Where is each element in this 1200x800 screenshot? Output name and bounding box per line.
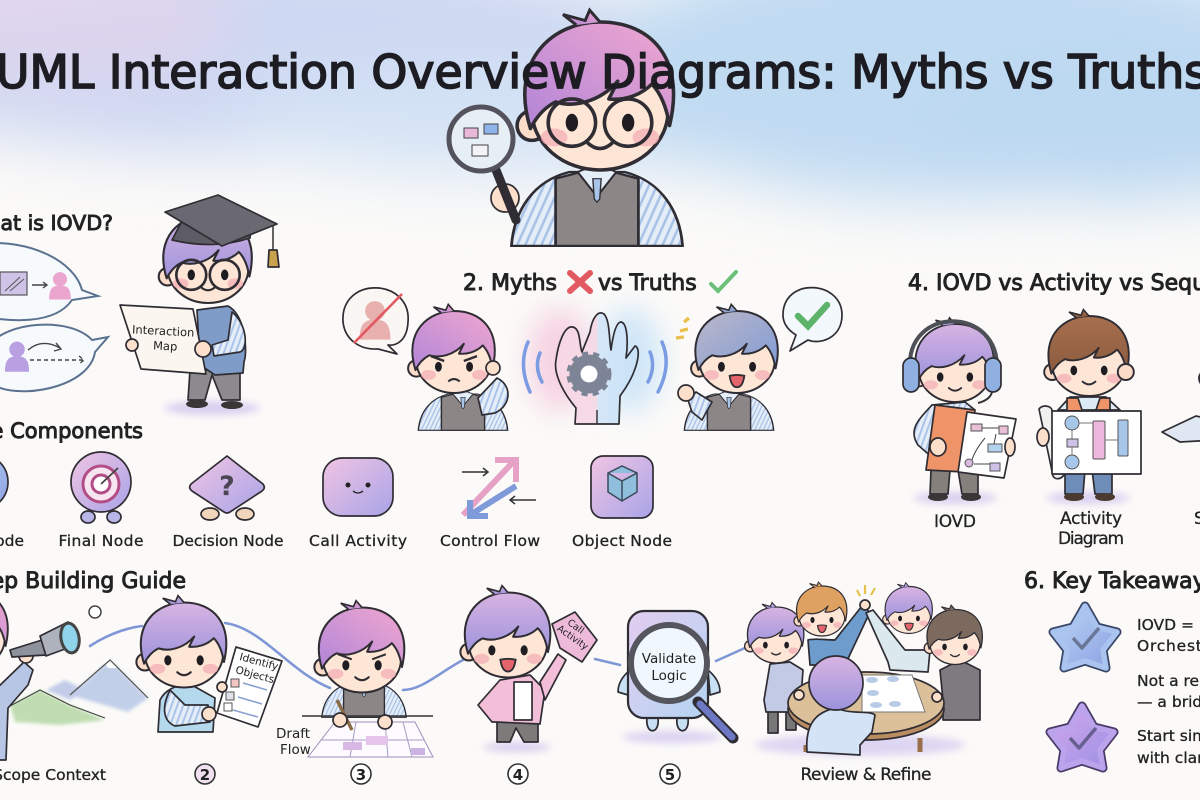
tick icon xyxy=(798,305,827,326)
takeaway text 3 xyxy=(1137,727,1200,767)
tick icon xyxy=(711,272,736,291)
draft flow label: Draft xyxy=(276,726,310,742)
speech bubble: sequence flow xyxy=(0,325,108,391)
number: 3 xyxy=(356,766,366,784)
shoes xyxy=(186,400,243,409)
head xyxy=(1199,314,1200,403)
panel: what is IOVD xyxy=(0,195,279,415)
mountains xyxy=(10,658,148,725)
map paper: Map xyxy=(153,338,178,354)
shadow xyxy=(1046,492,1130,504)
hands xyxy=(930,438,1015,456)
shoes xyxy=(928,493,981,501)
palm xyxy=(556,313,638,424)
table edge xyxy=(302,715,433,717)
cross icon xyxy=(570,273,590,291)
bust xyxy=(684,392,774,430)
raised arm xyxy=(540,654,566,700)
step 6: review team xyxy=(745,582,982,785)
raised arm xyxy=(478,378,508,415)
takeaway text 1: IOVD = xyxy=(1137,616,1194,634)
heading xyxy=(463,271,736,296)
lens xyxy=(631,625,707,701)
hands xyxy=(202,682,227,721)
headset xyxy=(903,321,1001,403)
body xyxy=(158,684,215,732)
label: Review & Refine xyxy=(800,765,932,785)
apron xyxy=(926,405,975,472)
truth character xyxy=(676,304,778,430)
label: Diagram xyxy=(1058,529,1124,549)
number xyxy=(660,764,680,784)
initial node xyxy=(0,454,24,550)
bust xyxy=(418,392,508,430)
panel: myths vs truths xyxy=(343,271,842,430)
takeaway text 2 xyxy=(1137,672,1200,711)
map paper xyxy=(120,305,206,374)
arms and legs xyxy=(618,670,720,731)
torso xyxy=(197,306,246,375)
shadow xyxy=(164,401,260,415)
heading: 2. Myths xyxy=(463,271,557,296)
hands xyxy=(794,600,942,702)
checklist: Objects xyxy=(234,664,275,686)
character bust xyxy=(511,168,683,246)
speech bubble: interaction fragment xyxy=(0,243,98,320)
map paper: Interaction xyxy=(132,322,195,340)
head xyxy=(691,304,778,393)
gear hand xyxy=(523,308,666,424)
bust xyxy=(322,681,406,717)
jacket xyxy=(478,675,545,724)
step 3: draft flow xyxy=(276,601,433,784)
sparkles xyxy=(676,318,689,338)
panel: step building guide xyxy=(0,569,982,785)
panel: components xyxy=(0,419,672,550)
hands xyxy=(126,339,211,357)
head xyxy=(408,304,495,393)
telescope xyxy=(10,622,81,657)
step 5: validate logic xyxy=(618,611,733,784)
number: 2 xyxy=(200,766,210,784)
torso xyxy=(1058,397,1120,410)
number xyxy=(351,764,371,784)
grid plan xyxy=(308,722,433,757)
magnifier xyxy=(449,107,516,220)
explorer xyxy=(0,584,33,760)
hand xyxy=(491,184,519,212)
star icon: blue xyxy=(1053,606,1117,668)
step 2: identify objects xyxy=(136,596,282,784)
head xyxy=(314,601,404,692)
takeaway text 1 xyxy=(1137,616,1200,655)
final node xyxy=(58,452,144,550)
draft flow label: Flow xyxy=(280,742,311,758)
shadow xyxy=(483,742,551,752)
label xyxy=(1058,509,1124,549)
head xyxy=(136,596,226,688)
decision node: ? xyxy=(219,471,235,502)
puzzle piece: Call xyxy=(565,617,586,637)
control flow: Control Flow xyxy=(440,532,540,550)
myth character xyxy=(408,304,508,430)
legs xyxy=(930,470,978,494)
IOVD character xyxy=(903,318,1016,532)
step 1: scope context xyxy=(0,584,148,784)
decision node: Decision Node xyxy=(172,532,284,550)
step 5: validate logic: Logic xyxy=(651,668,687,684)
label: Activity xyxy=(1060,509,1122,529)
head xyxy=(159,208,252,303)
call activity: Call Activity xyxy=(309,532,407,550)
panel: key takeaways xyxy=(1024,569,1200,768)
shadow xyxy=(755,734,965,756)
panel: IOVD vs activity vs sequence xyxy=(903,271,1200,549)
legs xyxy=(188,370,240,400)
back teammate xyxy=(807,656,875,755)
target circle xyxy=(89,606,101,618)
connector path xyxy=(90,623,747,690)
blonde teammate xyxy=(794,582,870,665)
head xyxy=(1044,310,1134,396)
object node: Object Node xyxy=(572,532,672,550)
character head xyxy=(517,10,674,170)
checklist xyxy=(217,647,282,727)
tick on purple star xyxy=(1070,728,1096,748)
number xyxy=(508,764,528,784)
number: 4 xyxy=(513,766,523,784)
gear xyxy=(575,360,603,388)
sequence diagram character xyxy=(1162,314,1200,529)
round table xyxy=(788,672,944,752)
label: IOVD xyxy=(934,512,976,532)
control flow xyxy=(440,460,540,550)
step 5: validate logic: Validate xyxy=(642,651,696,667)
legs xyxy=(1065,470,1112,494)
activity diagram character xyxy=(1037,310,1141,549)
title: UML Interaction Overview Diagrams: Myths vs Truths xyxy=(0,45,1200,99)
step 4: call activity xyxy=(460,586,597,784)
glow xyxy=(528,308,592,412)
graduation cap xyxy=(165,195,279,267)
object node xyxy=(572,456,672,550)
diagram board xyxy=(1052,411,1141,474)
call activity xyxy=(309,458,407,550)
shadow xyxy=(622,731,722,743)
shoes xyxy=(1064,493,1115,501)
tablet xyxy=(1162,416,1200,442)
draft flow label xyxy=(276,726,311,758)
left teammate xyxy=(745,603,804,733)
wave arcs xyxy=(523,342,666,392)
robot body xyxy=(628,611,708,718)
graduate character xyxy=(120,195,279,415)
legs xyxy=(497,718,538,742)
star icon: purple xyxy=(1050,706,1114,768)
sleeve xyxy=(212,312,245,356)
final node: Final Node xyxy=(58,532,144,550)
heading: vs Truths xyxy=(598,271,697,296)
head xyxy=(911,318,994,402)
tick on blue star xyxy=(1073,628,1099,648)
truth speech bubble xyxy=(783,288,842,351)
decision node xyxy=(172,456,284,550)
grey teammate xyxy=(866,583,932,672)
number xyxy=(195,764,215,784)
sparks xyxy=(857,585,875,596)
head xyxy=(460,586,550,678)
shadow xyxy=(913,492,997,504)
handle xyxy=(698,702,733,738)
diagram board xyxy=(958,412,1016,478)
hand xyxy=(1037,428,1049,446)
raised sleeve xyxy=(688,392,712,420)
main character with magnifier xyxy=(449,10,683,246)
checklist: Identify xyxy=(238,651,279,673)
puzzle piece xyxy=(552,612,597,662)
rolled paper xyxy=(1039,406,1065,479)
pencil and hands xyxy=(337,700,352,730)
fist xyxy=(678,385,694,401)
myth speech bubble xyxy=(343,288,408,354)
puzzle piece: Activity xyxy=(555,623,590,653)
shirt xyxy=(914,402,975,460)
number: 5 xyxy=(665,766,675,784)
brown teammate xyxy=(924,605,982,720)
